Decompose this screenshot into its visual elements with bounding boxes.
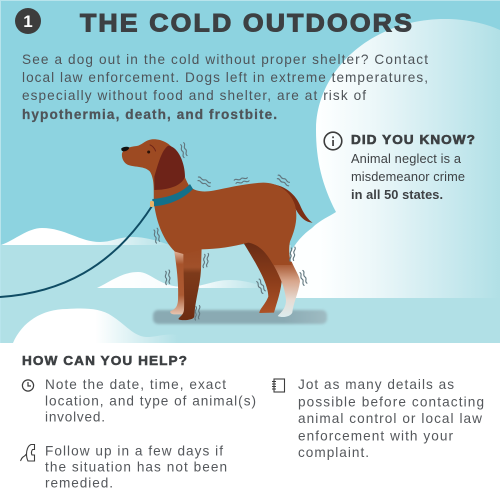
dog shadow bbox=[153, 310, 327, 324]
far front leg bbox=[170, 250, 187, 314]
brow bbox=[150, 145, 156, 151]
snow mound: lower left bbox=[13, 309, 178, 343]
snow mound: back left bbox=[1, 228, 170, 245]
did you know callout: misdemeanor crime bbox=[351, 169, 465, 184]
help item: jot: animal control or local law bbox=[298, 411, 482, 426]
tail bbox=[270, 184, 313, 223]
help item: jot bbox=[298, 377, 484, 460]
help item: note: Note the date, time, exact bbox=[45, 377, 226, 392]
intro text: See a dog out in the cold without proper shelter? Contact bbox=[22, 52, 428, 67]
help item: jot: Jot as many details as bbox=[298, 377, 454, 392]
help item: follow up: Follow up in a few days if bbox=[45, 444, 223, 458]
dog illustration bbox=[121, 139, 313, 320]
help item: note: location, and type of animal(s) bbox=[45, 394, 256, 408]
leash bbox=[0, 206, 152, 297]
ear bbox=[154, 146, 185, 190]
did you know callout: in all 50 states. bbox=[351, 187, 443, 202]
intro text bbox=[22, 52, 428, 122]
body and head bbox=[122, 139, 296, 265]
help item: jot: enforcement with your bbox=[298, 428, 453, 444]
title: THE COLD OUTDOORS bbox=[80, 10, 414, 38]
far rear leg bbox=[243, 237, 282, 313]
icon: notebook bbox=[272, 379, 284, 392]
did you know callout: Animal neglect is a bbox=[351, 151, 462, 166]
collar bbox=[152, 184, 193, 206]
number badge: 1 bbox=[23, 12, 33, 31]
number badge bbox=[15, 8, 41, 34]
help item: note: involved. bbox=[45, 410, 105, 424]
intro text: local law enforcement. Dogs left in extreme temperatures, bbox=[22, 70, 428, 85]
collar tag bbox=[150, 201, 154, 207]
large snow hill bbox=[277, 19, 500, 298]
did you know callout bbox=[324, 132, 476, 202]
intro text: hypothermia, death, and frostbite. bbox=[22, 107, 277, 122]
near front leg bbox=[178, 247, 202, 320]
snow mound: middle bbox=[97, 272, 270, 288]
help item: jot: possible before contacting bbox=[298, 394, 484, 410]
help heading: HOW CAN YOU HELP? bbox=[22, 353, 188, 368]
did you know callout: DID YOU KNOW? bbox=[351, 132, 476, 147]
sky background bbox=[0, 0, 500, 343]
near rear leg bbox=[272, 262, 300, 317]
help item: jot: complaint. bbox=[298, 445, 369, 460]
nose bbox=[121, 147, 129, 151]
help item: follow up: the situation has not been bbox=[45, 460, 227, 474]
icon: phone bbox=[20, 444, 34, 461]
help item: note bbox=[45, 377, 256, 424]
intro text: especially without food and shelter, are at risk of bbox=[22, 88, 366, 103]
ground bbox=[1, 245, 291, 343]
icon: info bbox=[324, 132, 342, 150]
icon: clock bbox=[22, 380, 34, 391]
help item: follow up bbox=[45, 444, 227, 490]
eye bbox=[147, 150, 150, 153]
shiver marks bbox=[153, 142, 308, 320]
help item: follow up: remedied. bbox=[45, 476, 113, 490]
